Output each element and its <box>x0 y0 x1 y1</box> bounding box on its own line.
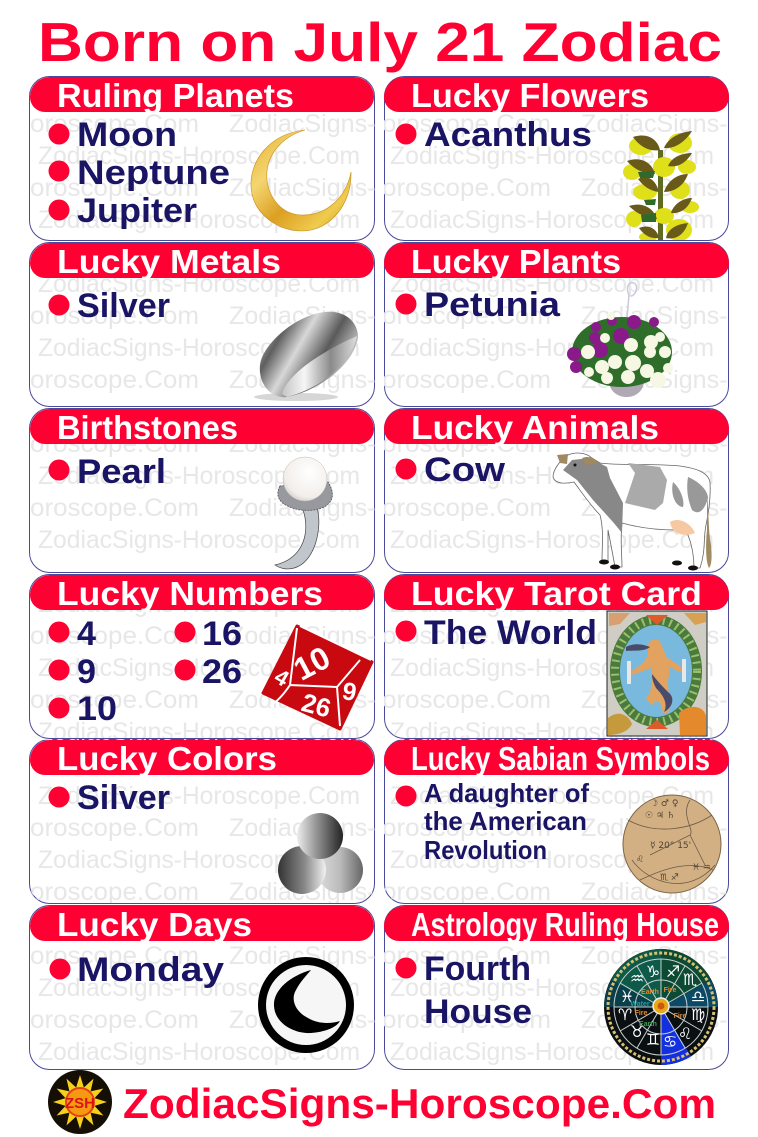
watermark text: left column: oroscope.Com <box>30 814 199 842</box>
watermark text: right column: ZodiacSigns-Horoscope.Com <box>390 974 714 1002</box>
watermark text: left column: ZodiacSigns-Horoscope.Com <box>38 142 360 170</box>
panel: lucky tarot card: The World <box>424 614 597 652</box>
watermark text: left column: ZodiacSigns-Horoscope <box>229 878 497 906</box>
watermark text: left column: ZodiacSigns-Horoscope.Com <box>38 718 360 746</box>
watermark text: right column: oroscope.Com <box>382 814 551 842</box>
icon: the world tarot card <box>607 611 707 736</box>
watermark text: left column: oroscope.Com <box>30 686 199 714</box>
panel: lucky numbers: Lucky Numbers <box>57 575 323 612</box>
watermark text: left column: ZodiacSigns-Horoscope.Com <box>38 526 360 554</box>
panel: lucky animals: Lucky Animals <box>411 409 659 446</box>
watermark text: left column: ZodiacSigns-Horoscope <box>229 814 497 842</box>
watermark text: left column: ZodiacSigns-Horoscope <box>229 302 497 330</box>
watermark text: left column: ZodiacSigns-Horoscope.Com <box>38 782 360 810</box>
icon: astrology wheel: ♊ <box>646 1030 660 1049</box>
watermark text: left column: ZodiacSigns-Horoscope <box>229 174 497 202</box>
panel: lucky flowers: Lucky Flowers <box>411 77 649 114</box>
panel: lucky sabian symbols: A daughter of <box>424 778 589 808</box>
panel: ruling planets: Neptune <box>77 154 230 192</box>
watermark text: right column: ZodiacSigns-Horoscope.Com <box>390 142 714 170</box>
icon: red die: 4 <box>270 664 294 692</box>
icon: astrology wheel: ♒ <box>630 969 644 988</box>
icon: crescent moon <box>251 130 351 231</box>
panel: lucky sabian symbols <box>384 740 729 893</box>
panel: birthstones: Birthstones <box>57 409 238 446</box>
watermark text: right column: oroscope.Com <box>382 686 551 714</box>
icon: hanging petunia basket <box>567 283 673 397</box>
icon: red die <box>263 626 372 729</box>
panel: ruling planets <box>30 77 374 231</box>
watermark text: left column: ZodiacSigns-Horoscope <box>229 1006 497 1034</box>
panel: lucky numbers: 4 <box>77 615 96 653</box>
footer website name: ZodiacSigns-Horoscope.Com <box>123 1080 716 1127</box>
watermark text: left column: ZodiacSigns-Horoscope.Com <box>38 846 360 874</box>
watermark text: right column: oroscope.Com <box>382 430 551 458</box>
panel: lucky colors <box>30 740 374 894</box>
watermark text: left column: ZodiacSigns-Horoscope.Com <box>38 334 360 362</box>
panel: lucky days: Lucky Days <box>57 906 252 943</box>
panel: lucky animals: Cow <box>424 451 506 489</box>
watermark text: left column: ZodiacSigns-Horoscope.Com <box>38 974 360 1002</box>
icon: astrology wheel: ♍ <box>691 1005 705 1024</box>
icon: red die: 10 <box>288 639 336 688</box>
watermark text: right column: ZodiacSigns-Horoscope.Com <box>390 718 714 746</box>
watermark text: right column: ZodiacSigns-Horoscope.Com <box>390 526 714 554</box>
panel: lucky sabian symbols: Revolution <box>424 835 547 865</box>
panel: lucky tarot card <box>384 575 729 736</box>
watermark text: left column: oroscope.Com <box>30 302 199 330</box>
panel: lucky colors: Silver <box>77 779 170 817</box>
watermark text: right column: ZodiacSigns-Horoscope.Com <box>390 846 714 874</box>
icon: astrology wheel: Earth <box>639 1021 657 1028</box>
icon: astrology wheel: ♏ <box>683 970 697 989</box>
icon: astrology wheel: Water <box>630 1001 650 1008</box>
panel: astrology ruling house: House <box>424 993 532 1031</box>
icon: sabian chart: ♏ ♐ <box>660 873 679 883</box>
icon: sabian chart: ♌ <box>636 855 644 865</box>
panel: lucky numbers: 9 <box>77 653 96 691</box>
footer logo: ZSH <box>65 1095 95 1112</box>
watermark text: left column: ZodiacSigns-Horoscope <box>229 430 497 458</box>
panel: astrology ruling house <box>384 906 729 1065</box>
panel: birthstones <box>30 409 374 569</box>
icon: cow <box>553 453 712 570</box>
icon: astrology wheel: ♓ <box>620 987 634 1006</box>
icon: astrology wheel: ♎ <box>691 987 705 1006</box>
watermark text: right column: oroscope.Com <box>382 494 551 522</box>
panel: lucky colors: Lucky Colors <box>57 740 277 777</box>
watermark text: right column: ZodiacSigns-Horoscope.Com <box>390 206 714 234</box>
panel: lucky sabian symbols: the American <box>424 806 587 836</box>
panel: lucky numbers <box>30 575 374 729</box>
watermark text: right column: oroscope.Com <box>382 878 551 906</box>
watermark text: left column: oroscope.Com <box>30 174 199 202</box>
watermark text: left column: ZodiacSigns-Horoscope.Com <box>38 206 360 234</box>
watermark text: right column: ZodiacSigns-Horoscope.Com <box>390 1038 714 1066</box>
watermark text: left column: ZodiacSigns-Horoscope <box>229 622 497 650</box>
watermark text: right column: ZodiacSigns-Horoscope.Com <box>390 462 714 490</box>
panel: lucky numbers: 16 <box>202 615 242 653</box>
panel: lucky numbers: 26 <box>202 653 242 691</box>
watermark text: left column: oroscope.Com <box>30 494 199 522</box>
panel: ruling planets: Jupiter <box>77 192 197 230</box>
panel: birthstones: Pearl <box>77 453 166 491</box>
watermark text: right column: oroscope.Com <box>382 1006 551 1034</box>
panel: lucky flowers: Acanthus <box>424 116 592 154</box>
icon: astrology wheel: ♑ <box>646 962 660 981</box>
panel: lucky animals <box>384 409 729 570</box>
watermark text: left column: oroscope.Com <box>30 622 199 650</box>
watermark text: left column: oroscope.Com <box>30 110 199 138</box>
watermark text: right column: oroscope.Com <box>382 302 551 330</box>
panel: lucky plants: Lucky Plants <box>411 243 621 280</box>
icon: astrology wheel: Fire <box>635 1010 648 1017</box>
panel: ruling planets: Moon <box>77 116 177 154</box>
panel: lucky days: Monday <box>77 951 224 989</box>
watermark text: left column <box>31 114 374 1065</box>
title: Born on July 21 Zodiac <box>38 11 722 73</box>
watermark text: left column: ZodiacSigns-Horoscope.Com <box>38 270 360 298</box>
icon: pearl ring <box>275 457 332 569</box>
panel: lucky numbers: 10 <box>77 690 117 728</box>
watermark text: right column: oroscope.Com <box>382 366 551 394</box>
icon: astrology wheel: ♈ <box>618 1005 632 1024</box>
icon: astrology wheel: ♉ <box>630 1022 644 1041</box>
icon: moon symbol <box>258 957 354 1053</box>
watermark text: left column: oroscope.Com <box>30 366 199 394</box>
watermark text: left column: ZodiacSigns-Horoscope <box>229 494 497 522</box>
icon: astrology wheel: ♌ <box>678 1024 692 1043</box>
panel: lucky tarot card: Lucky Tarot Card <box>411 575 702 612</box>
panel: lucky days <box>30 906 374 1053</box>
icon: astrology wheel: Earth <box>641 989 659 996</box>
watermark text: right column <box>382 110 758 1066</box>
watermark text: right column: ZodiacSigns-Horoscope.Com <box>390 590 714 618</box>
panel: lucky plants <box>384 243 729 397</box>
watermark text: right column: ZodiacSigns-Horoscope.Com <box>390 782 714 810</box>
icon: sabian chart: ☽ ♂ ♀ <box>650 799 678 809</box>
watermark text: right column: ZodiacSigns-Horoscope.Com <box>390 270 714 298</box>
watermark text: left column: ZodiacSigns-Horoscope <box>229 366 497 394</box>
panel: lucky flowers <box>384 77 729 242</box>
watermark text: right column: oroscope.Com <box>382 174 551 202</box>
icon: silver ring <box>254 312 358 401</box>
icon: red die: 9 <box>340 677 359 707</box>
icon: silver spheres <box>278 813 363 894</box>
panel: astrology ruling house: Fourth <box>424 950 531 988</box>
icon: sabian chart: ♓ ♒ <box>692 863 711 873</box>
watermark text: left column: ZodiacSigns-Horoscope <box>229 942 497 970</box>
watermark text: left column: ZodiacSigns-Horoscope.Com <box>38 590 360 618</box>
icon: astrology wheel: Fire <box>674 1013 687 1020</box>
watermark text: left column: ZodiacSigns-Horoscope.Com <box>38 462 360 490</box>
watermark text: right column: ZodiacSigns-Horoscope.Com <box>390 334 714 362</box>
panel: ruling planets: Ruling Planets <box>57 77 294 114</box>
icon: sabian chart <box>623 795 721 893</box>
footer logo <box>48 1070 112 1134</box>
icon: acanthus flower <box>623 131 699 242</box>
watermark text: left column: oroscope.Com <box>30 942 199 970</box>
icon: sabian chart: ☉ ♃ ♄ <box>645 811 675 821</box>
watermark text: left column: ZodiacSigns-Horoscope <box>229 110 497 138</box>
watermark text: right column: oroscope.Com <box>382 942 551 970</box>
watermark text: right column: oroscope.Com <box>382 110 551 138</box>
watermark text: left column: ZodiacSigns-Horoscope.Com <box>38 654 360 682</box>
watermark text: left column: oroscope.Com <box>30 430 199 458</box>
icon: astrology wheel: ♋ <box>663 1032 677 1051</box>
icon: astrology wheel: Fire <box>664 987 677 994</box>
watermark text: left column: oroscope.Com <box>30 878 199 906</box>
watermark text: left column: ZodiacSigns-Horoscope <box>229 686 497 714</box>
panel: lucky plants: Petunia <box>424 286 561 324</box>
watermark text: left column: oroscope.Com <box>30 1006 199 1034</box>
icon: red die: 26 <box>298 687 334 724</box>
icon: sabian chart: ☿ 20° 15' <box>650 841 691 851</box>
icon: astrology wheel: ♐ <box>666 962 680 981</box>
watermark text: right column: ZodiacSigns-Horoscope.Com <box>390 654 714 682</box>
watermark text: right column: oroscope.Com <box>382 622 551 650</box>
watermark text: left column: ZodiacSigns-Horoscope.Com <box>38 1038 360 1066</box>
panel: lucky metals <box>30 243 374 401</box>
icon: astrology wheel <box>604 949 718 1065</box>
panel: lucky metals: Lucky Metals <box>57 243 281 280</box>
panel: lucky metals: Silver <box>77 287 170 325</box>
